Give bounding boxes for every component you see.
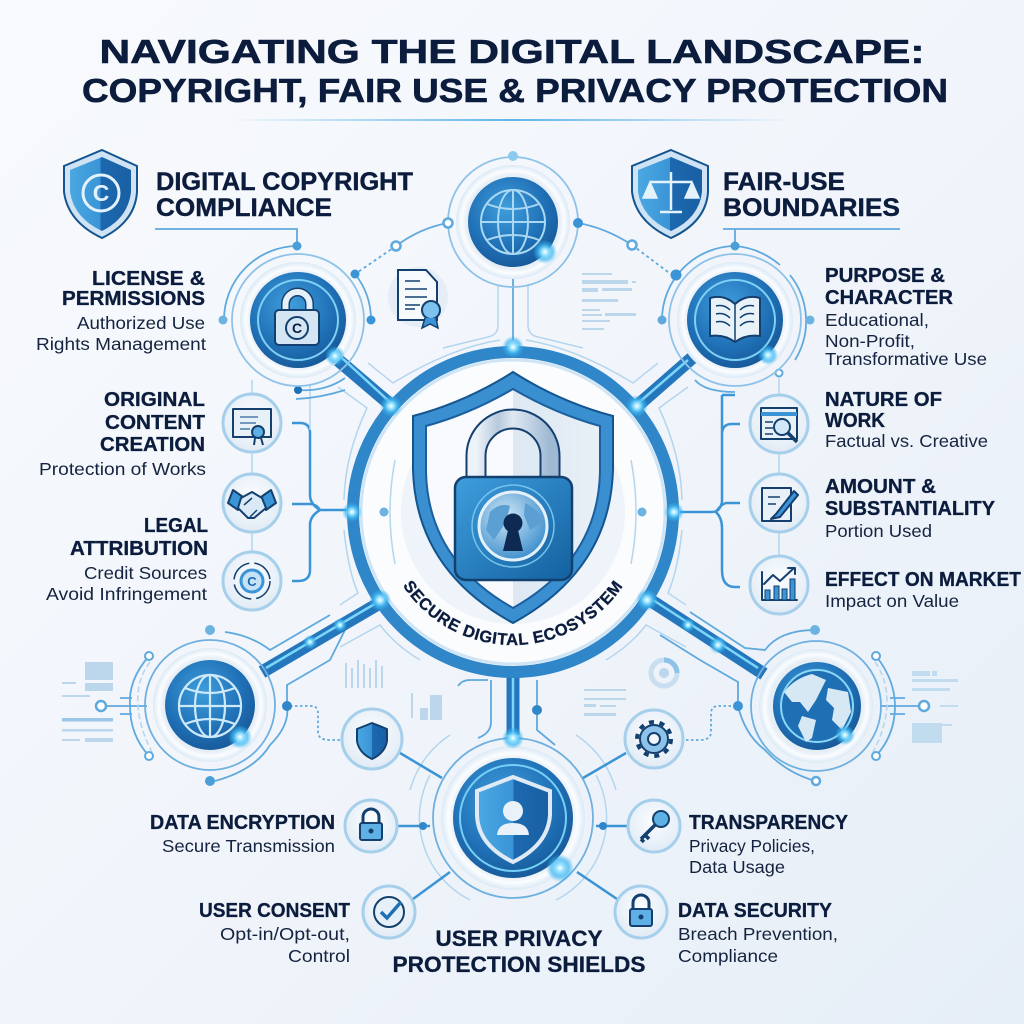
lower centre circuits	[458, 680, 491, 738]
item: nature of work: WORK	[825, 410, 886, 432]
item: data encryption: DATA ENCRYPTION	[150, 812, 335, 834]
heading	[156, 168, 413, 222]
title	[82, 33, 948, 121]
title: NAVIGATING THE DIGITAL LANDSCAPE:	[100, 33, 924, 70]
item: license and permissions: Authorized Use	[77, 313, 205, 333]
panel: right fair use items	[750, 265, 1021, 614]
icon: scales shield	[632, 150, 708, 238]
node: license lock	[218, 242, 376, 386]
title: COPYRIGHT, FAIR USE & PRIVACY PROTECTION	[82, 72, 948, 109]
item: purpose and character	[825, 265, 987, 369]
icon: handshake	[223, 474, 281, 532]
icon: copyright shield	[64, 150, 137, 238]
item: user consent	[199, 900, 350, 966]
heading: DIGITAL COPYRIGHT	[156, 168, 413, 196]
item: amount and substantiality	[825, 476, 996, 541]
item: license and permissions: Rights Management	[36, 334, 206, 354]
heading	[723, 168, 900, 222]
item: original content creation: CONTENT	[105, 412, 205, 434]
icon: key	[628, 800, 680, 852]
item: license and permissions	[36, 268, 206, 354]
item: user consent: Control	[288, 946, 350, 966]
item: purpose and character: Educational,	[825, 310, 929, 330]
heading: BOUNDARIES	[723, 194, 900, 222]
circular label: SECURE DIGITAL ECOSYSTEM	[404, 580, 622, 646]
node: right earth	[733, 625, 929, 785]
icon: check	[363, 886, 415, 938]
item: original content creation: ORIGINAL	[104, 389, 205, 411]
heading: user privacy protection shields	[392, 926, 646, 977]
icon: main padlock	[455, 419, 572, 580]
icon: gear	[625, 710, 683, 768]
item: data security	[678, 900, 838, 966]
item: amount and substantiality: SUBSTANTIALITY	[825, 498, 996, 520]
icon: ring chart	[651, 660, 677, 686]
icon: copyright refresh	[223, 552, 281, 610]
item: transparency: Data Usage	[689, 857, 785, 877]
icon: small shield	[342, 709, 402, 769]
icon: magnified page	[750, 395, 808, 453]
item: effect on market: EFFECT ON MARKET	[825, 569, 1021, 591]
lower right circuits	[660, 612, 815, 706]
item: nature of work: NATURE OF	[825, 389, 942, 411]
panel: fair-use boundaries header	[632, 150, 900, 238]
connector arms	[262, 358, 764, 735]
item: original content creation: CREATION	[100, 434, 205, 456]
glow nodes	[303, 336, 727, 749]
item: purpose and character: Transformative Use	[825, 349, 987, 369]
panel: digital copyright compliance header	[64, 150, 413, 238]
left bus	[292, 423, 352, 581]
item: license and permissions: LICENSE &	[92, 268, 205, 290]
item: purpose and character: Non-Profit,	[825, 331, 915, 351]
center ring and badge	[347, 346, 679, 678]
node: license lock: C	[292, 320, 302, 336]
item: transparency	[689, 812, 849, 877]
icon: certificate	[223, 394, 281, 452]
item: original content creation	[39, 389, 206, 479]
item: amount and substantiality: AMOUNT &	[825, 476, 936, 498]
item: nature of work: Factual vs. Creative	[825, 431, 988, 451]
lower left circuits	[225, 615, 345, 706]
item: effect on market	[825, 569, 1021, 611]
node: bottom user shield	[419, 738, 607, 900]
icon: growth chart	[750, 556, 808, 614]
item: legal attribution: ATTRIBUTION	[70, 538, 208, 560]
icon: copyright shield: C	[93, 180, 109, 206]
item: legal attribution: Credit Sources	[84, 563, 207, 583]
item: license and permissions: PERMISSIONS	[62, 288, 205, 310]
item: effect on market: Impact on Value	[825, 591, 959, 611]
thin circuit lines	[107, 223, 920, 790]
panel: left copyright items	[36, 268, 281, 610]
item: user consent: Opt-in/Opt-out,	[220, 924, 350, 944]
item: data security: Compliance	[678, 946, 778, 966]
node: open book	[658, 242, 814, 386]
heading: user privacy protection shields: USER PRIVACY	[436, 926, 603, 951]
heading: user privacy protection shields: PROTECTION SHIELDS	[392, 952, 646, 977]
item: data security: Breach Prevention,	[678, 924, 838, 944]
panel: user privacy items	[150, 709, 849, 977]
item: transparency: TRANSPARENCY	[689, 812, 849, 834]
item: legal attribution: Avoid Infringement	[46, 584, 207, 604]
decorative data marks	[62, 273, 958, 743]
item: data encryption: Secure Transmission	[162, 836, 335, 856]
heading: COMPLIANCE	[156, 194, 332, 222]
icon: main shield	[413, 372, 613, 623]
node: left globe	[96, 625, 292, 786]
icon: certificate document	[388, 267, 448, 328]
icon: small lock	[345, 800, 397, 852]
right bus	[674, 395, 740, 587]
heading: FAIR-USE	[723, 168, 845, 196]
item: legal attribution: LEGAL	[144, 515, 208, 537]
item: data encryption	[150, 812, 335, 856]
icon: security lock	[615, 886, 667, 938]
item: transparency: Privacy Policies,	[689, 836, 815, 856]
item: data security: DATA SECURITY	[678, 900, 833, 922]
icon: copyright refresh: C	[247, 574, 257, 589]
item: purpose and character: PURPOSE &	[825, 265, 945, 287]
item: legal attribution	[46, 515, 208, 604]
item: purpose and character: CHARACTER	[825, 287, 954, 309]
icon: pencil note	[750, 474, 808, 532]
item: amount and substantiality: Portion Used	[825, 521, 932, 541]
item: nature of work	[825, 389, 988, 451]
spokes	[397, 753, 628, 899]
item: user consent: USER CONSENT	[199, 900, 350, 922]
node: top globe	[392, 151, 636, 287]
item: original content creation: Protection of Works	[39, 459, 206, 479]
